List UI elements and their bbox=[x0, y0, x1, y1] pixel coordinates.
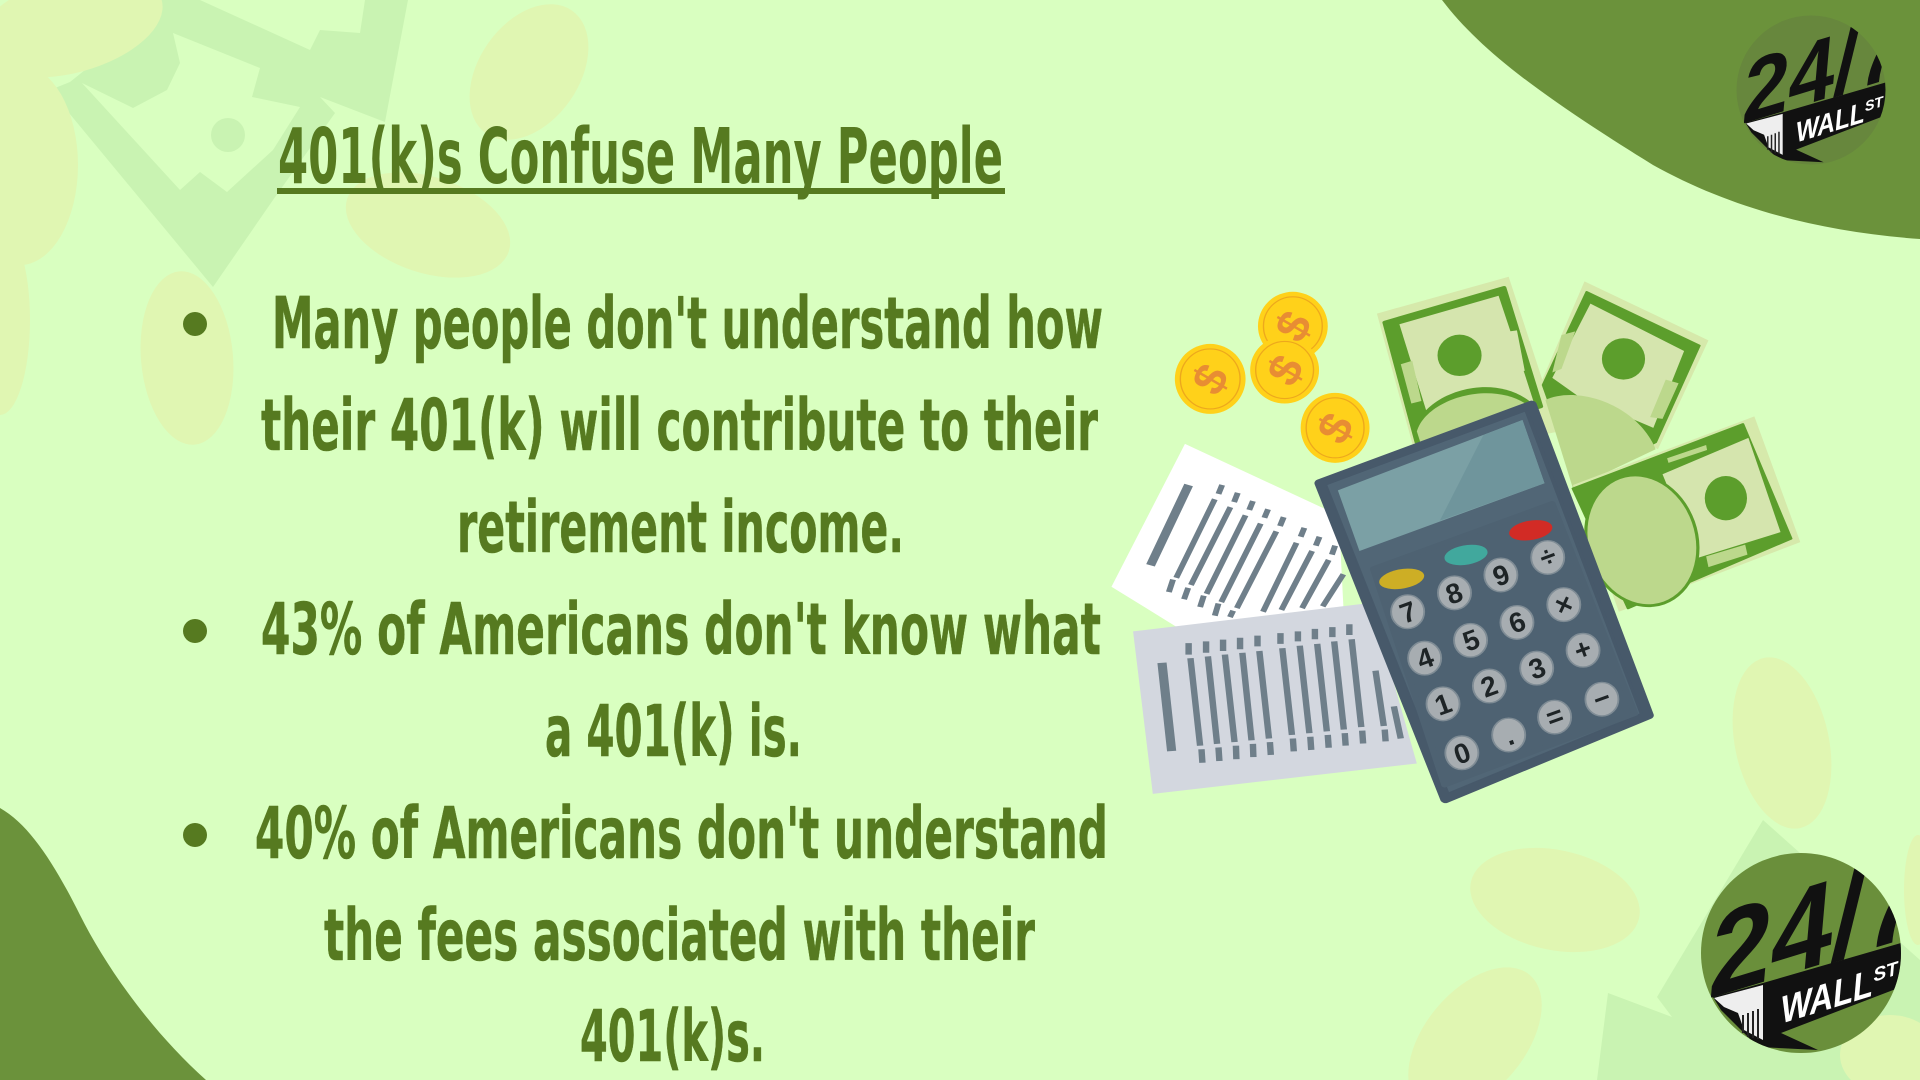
bullet item 2: 43% of Americans don't know what bbox=[261, 588, 1101, 671]
calculator key labels bbox=[1396, 539, 1615, 771]
calculator key labels: × bbox=[1551, 587, 1577, 622]
coins bbox=[1175, 292, 1370, 463]
coin dollar signs: $ bbox=[1181, 355, 1239, 403]
bullet item 1: Many people don't understand how bbox=[272, 282, 1103, 365]
calculator key labels: . bbox=[1500, 720, 1518, 751]
calculator key labels: 6 bbox=[1505, 605, 1530, 640]
logo bottom-right: ST bbox=[1873, 958, 1899, 987]
calculator key labels: + bbox=[1570, 632, 1596, 667]
calculator key labels: 2 bbox=[1477, 669, 1502, 704]
faint banknote top-left bbox=[50, 0, 408, 287]
calculator key labels: = bbox=[1542, 699, 1568, 734]
coin dollar signs bbox=[1181, 302, 1364, 452]
title: 401(k)s Confuse Many People bbox=[278, 113, 1003, 202]
corner blob bottom-left bbox=[0, 808, 206, 1080]
bullet item 1: their 401(k) will contribute to their bbox=[261, 384, 1098, 467]
calculator keypad bbox=[1373, 504, 1635, 785]
logo top-right bbox=[1736, 16, 1886, 164]
calculator key labels: 3 bbox=[1525, 651, 1550, 686]
coin dollar signs: $ bbox=[1256, 346, 1314, 394]
bill 2 bbox=[1541, 281, 1708, 489]
logo bottom-right bbox=[1701, 853, 1901, 1053]
logo bottom-right: WALL bbox=[1779, 961, 1875, 1033]
receipt 1 bbox=[1111, 444, 1343, 628]
bullet item 3: the fees associated with their bbox=[324, 894, 1035, 977]
bill 1 bbox=[1377, 277, 1559, 460]
calculator key labels: 0 bbox=[1450, 736, 1475, 771]
calculator key labels: ÷ bbox=[1535, 539, 1560, 574]
logo top-right: ST bbox=[1864, 94, 1884, 116]
logo top-right: WALL bbox=[1795, 96, 1866, 150]
calculator body bbox=[1319, 405, 1649, 799]
bullet item 3 bbox=[183, 792, 1108, 1078]
calculator key labels: 7 bbox=[1396, 595, 1421, 630]
faint banknote bottom-right bbox=[1597, 820, 1920, 1080]
calculator key labels: 8 bbox=[1442, 576, 1467, 611]
bullet item 2 bbox=[183, 588, 1101, 773]
calculator key labels: − bbox=[1589, 681, 1615, 716]
keys bbox=[1391, 541, 1618, 770]
calculator key labels: 9 bbox=[1489, 558, 1514, 593]
bullet item 1: retirement income. bbox=[457, 486, 904, 569]
bullet list bbox=[183, 282, 1108, 1078]
bullet item 1 bbox=[183, 282, 1103, 569]
title bbox=[277, 113, 1005, 202]
bullet item 3: 40% of Americans don't understand bbox=[255, 792, 1108, 875]
bullet item 2: a 401(k) is. bbox=[545, 690, 802, 773]
calculator key labels: 5 bbox=[1459, 623, 1484, 658]
corner blob top-right bbox=[1442, 0, 1920, 239]
calculator key labels: 4 bbox=[1413, 641, 1438, 676]
calculator key labels: 1 bbox=[1431, 687, 1456, 722]
function buttons bbox=[1376, 565, 1427, 593]
coin dollar signs: $ bbox=[1306, 404, 1364, 452]
bullet item 3: 401(k)s. bbox=[580, 995, 765, 1078]
coin dollar signs: $ bbox=[1264, 302, 1322, 350]
receipt 2 bbox=[1133, 603, 1417, 794]
calculator screen bbox=[1338, 420, 1545, 551]
illustration: money and calculator bbox=[1111, 277, 1800, 799]
bill 3 bbox=[1573, 416, 1800, 613]
